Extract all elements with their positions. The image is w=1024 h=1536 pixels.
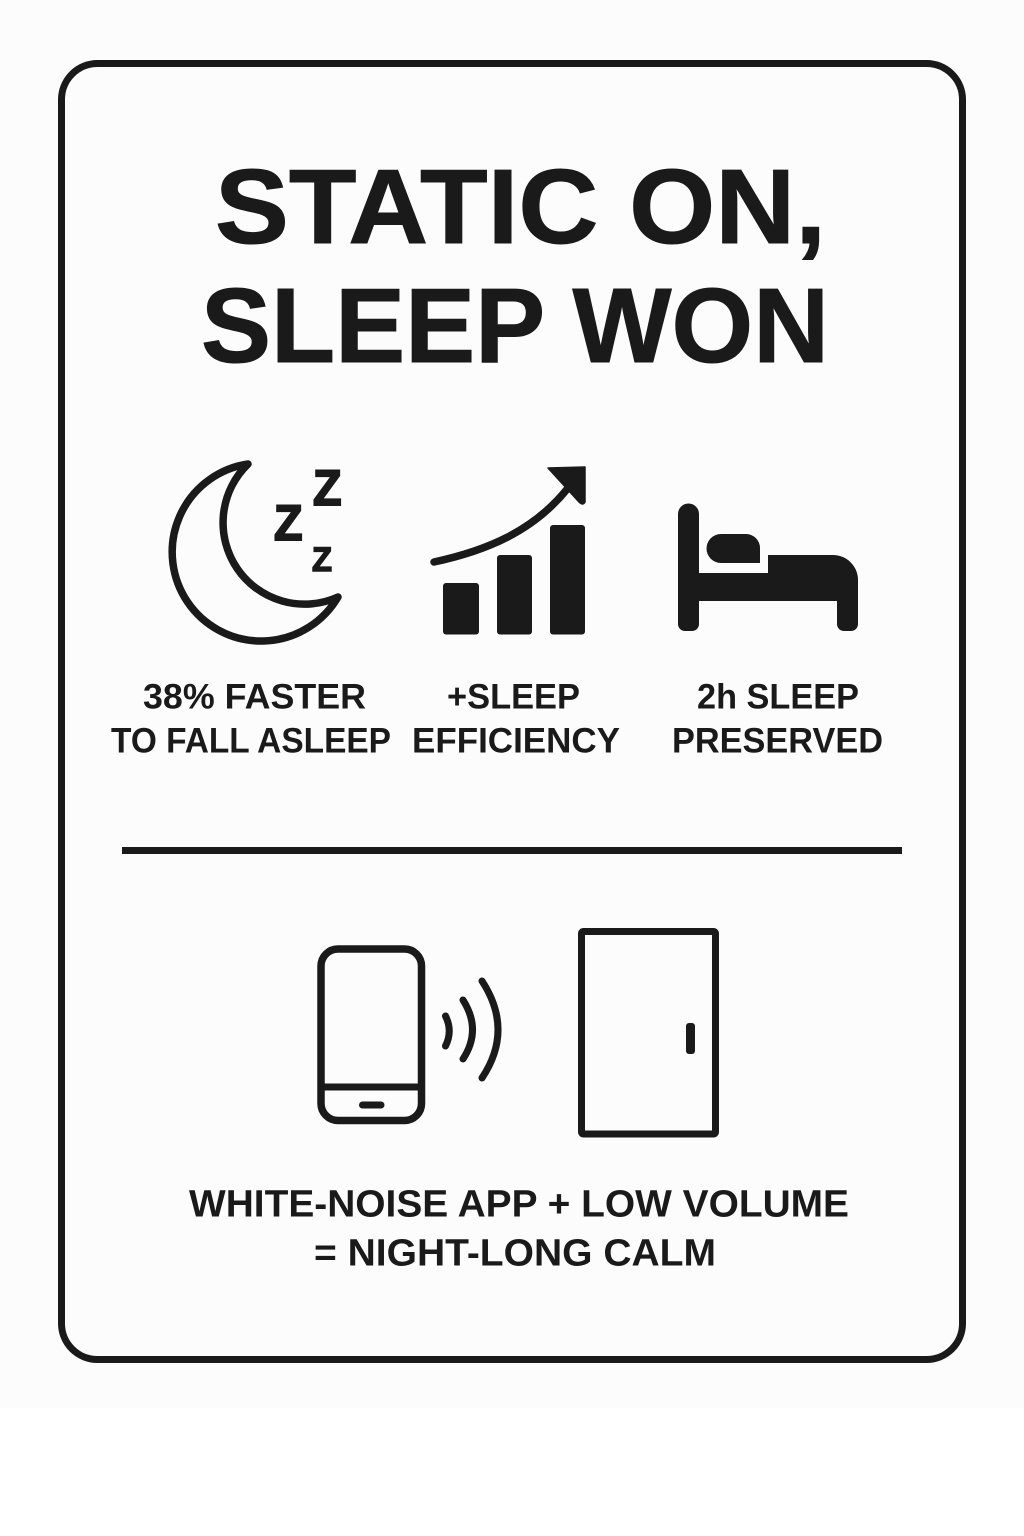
label: 38% faster: 38% FASTER <box>143 676 366 716</box>
label: sleep efficiency <box>412 676 620 760</box>
icon: bed <box>678 504 858 631</box>
icon: sound waves <box>446 981 498 1078</box>
icon: door <box>582 932 716 1134</box>
label: sleep efficiency: EFFICIENCY <box>412 720 620 760</box>
caption: WHITE-NOISE APP + LOW VOLUME <box>189 1184 849 1226</box>
label: 2h sleep preserved: 2h SLEEP <box>697 676 859 716</box>
caption <box>189 1184 849 1274</box>
icon: moon with Z letters: Z <box>313 460 342 516</box>
icon: rising bar chart with arrow <box>434 467 585 634</box>
icon: moon with Z letters: Z <box>312 541 332 579</box>
title <box>201 148 829 385</box>
icon: moon with Z letters: Z <box>274 495 302 551</box>
outer frame <box>62 64 962 1360</box>
label: 38% faster <box>111 676 391 760</box>
label: 2h sleep preserved: PRESERVED <box>672 720 883 760</box>
title: STATIC ON, <box>215 148 826 266</box>
label: 38% faster: TO FALL ASLEEP <box>111 720 391 760</box>
icon: moon with Z letters <box>172 460 342 641</box>
label: 2h sleep preserved <box>672 676 883 760</box>
caption: = NIGHT-LONG CALM <box>314 1232 716 1274</box>
title: SLEEP WON <box>201 267 829 385</box>
icon: phone <box>321 949 422 1120</box>
label: sleep efficiency: +SLEEP <box>447 676 580 716</box>
